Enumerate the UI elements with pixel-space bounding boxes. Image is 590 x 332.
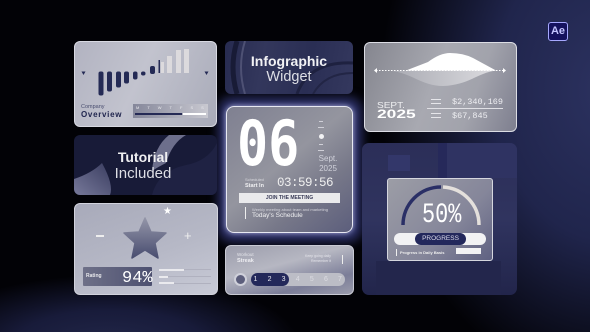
title: infographic: Infographic bbox=[251, 53, 327, 69]
label: start in: Start In bbox=[245, 183, 264, 189]
icon: after effects bbox=[548, 22, 568, 41]
label: streak note bbox=[305, 255, 343, 264]
countdown timer: 03:59:56 bbox=[277, 176, 333, 190]
mini chart bbox=[133, 104, 208, 118]
button: join: JOIN THE MEETING bbox=[266, 194, 313, 200]
heading: company overview: Overview bbox=[81, 110, 122, 119]
label stripes bbox=[431, 99, 441, 119]
label: start in bbox=[245, 177, 264, 189]
wave chart bbox=[374, 53, 506, 86]
divider bbox=[427, 108, 503, 109]
value one: $2,340,169 bbox=[452, 97, 503, 107]
label: streak bbox=[237, 252, 254, 264]
panel: countdown bbox=[226, 106, 353, 233]
center glow bbox=[218, 97, 362, 242]
mini button bbox=[456, 248, 481, 254]
label: streak: Workout bbox=[237, 252, 254, 257]
gauge bbox=[401, 185, 481, 225]
rating box bbox=[83, 267, 152, 286]
progress card bbox=[387, 178, 493, 261]
panel: tutorial included bbox=[74, 135, 217, 195]
percentage: 50% bbox=[422, 200, 461, 231]
bar chart bbox=[82, 49, 208, 96]
mini chart: MTWTFSS bbox=[136, 105, 212, 110]
date: sept 2025: 2025 bbox=[377, 107, 416, 121]
photo backdrop bbox=[388, 143, 517, 171]
month text: Sept. 2025 bbox=[319, 154, 337, 172]
panel: company overview bbox=[74, 41, 217, 127]
label: start in: Scheduled bbox=[245, 177, 264, 182]
panel: progress photo bbox=[362, 143, 517, 295]
day pill bbox=[251, 273, 345, 286]
label: streak: Streak bbox=[237, 258, 254, 264]
panel artwork bbox=[74, 135, 217, 195]
schedule text bbox=[245, 207, 335, 219]
rating bars bbox=[159, 269, 211, 286]
date number: 06 bbox=[237, 107, 299, 180]
label: streak note: Remember it bbox=[311, 259, 331, 263]
value two: $67,845 bbox=[452, 111, 488, 121]
icon: star bbox=[123, 217, 167, 259]
icon: drop bbox=[234, 273, 247, 286]
subtitle: widget: Widget bbox=[266, 69, 312, 85]
panel: streak bbox=[225, 245, 354, 295]
subtitle: included: Included bbox=[115, 165, 171, 182]
heading: company overview: Company bbox=[81, 104, 105, 110]
panel: rating bbox=[74, 203, 218, 295]
rating box: Rating bbox=[86, 273, 102, 279]
schedule text: Weekly meeting about team and marketing bbox=[252, 207, 328, 212]
panel artwork bbox=[230, 41, 353, 94]
button: join bbox=[239, 192, 340, 202]
heading: company overview bbox=[81, 104, 122, 119]
label: streak note: Keep going daily bbox=[305, 254, 331, 258]
day pill: 1234567 bbox=[254, 276, 352, 283]
rating value: 94% bbox=[122, 269, 153, 288]
icon: plus: + bbox=[184, 228, 192, 243]
icon: minus bbox=[96, 235, 104, 236]
icon: small star: ★ bbox=[163, 206, 172, 217]
icon: after effects: Ae bbox=[551, 25, 565, 37]
schedule text: Today's Schedule bbox=[252, 212, 303, 219]
panel: sales wave bbox=[364, 42, 517, 132]
title: tutorial: Tutorial bbox=[118, 149, 168, 165]
date: sept 2025 bbox=[377, 100, 416, 121]
progress bar: PROGRESS bbox=[422, 235, 459, 242]
caption bbox=[396, 249, 447, 256]
date: sept 2025: SEPT. bbox=[377, 100, 405, 110]
calendar icons bbox=[318, 121, 324, 151]
caption: Progress in Daily Basis bbox=[400, 250, 444, 255]
progress bar bbox=[394, 233, 486, 245]
panel: infographic widget bbox=[225, 41, 353, 94]
